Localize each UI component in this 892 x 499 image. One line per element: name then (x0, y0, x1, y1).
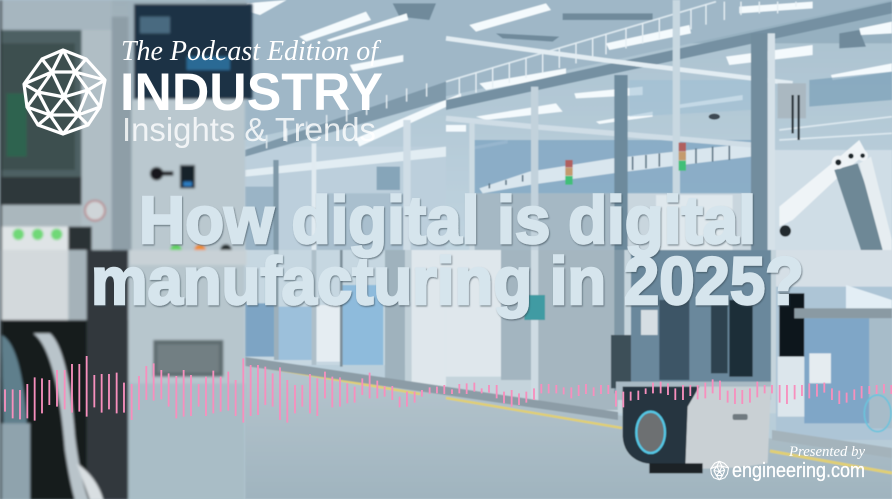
presented by label: Presented by (788, 444, 865, 460)
camera and junction box (778, 83, 806, 118)
railing (479, 143, 751, 193)
main gantry beam (446, 2, 892, 110)
presenter credit (711, 444, 865, 482)
robot body (623, 387, 771, 469)
waveform right half (452, 379, 891, 407)
horizontal rails (446, 38, 793, 83)
floor (245, 363, 892, 499)
engineering.com wordmark: engineering.com (732, 460, 865, 482)
status screen (134, 4, 252, 99)
podcast series heading (120, 35, 383, 148)
ceiling and lights (206, 0, 892, 250)
lower factory glass bays (245, 250, 446, 390)
audio waveform (5, 356, 891, 423)
title line 2: manufacturing in 2025? (91, 244, 804, 319)
icon: engineering.com logo (711, 461, 729, 480)
waveform left half (5, 356, 444, 423)
main title (91, 183, 804, 319)
heading line: The Podcast Edition of: The Podcast Edition of (121, 35, 382, 67)
heading line: Insights & Trends: Insights & Trends (122, 111, 376, 148)
podcast logo: geodesic icon (24, 50, 105, 134)
mobile robot tower (611, 250, 891, 473)
yellow floor line (245, 364, 892, 473)
lower machines behind title (474, 193, 614, 250)
robot arm (779, 140, 867, 227)
base rail (245, 357, 618, 420)
left glass section (243, 0, 446, 250)
blurred foreground control cabinets (0, 0, 252, 499)
title line 1: How digital is digital (139, 183, 756, 258)
glass posts (531, 87, 538, 250)
blue back wall (474, 140, 751, 193)
signal towers (565, 160, 573, 167)
heading line: INDUSTRY: INDUSTRY (120, 63, 383, 122)
